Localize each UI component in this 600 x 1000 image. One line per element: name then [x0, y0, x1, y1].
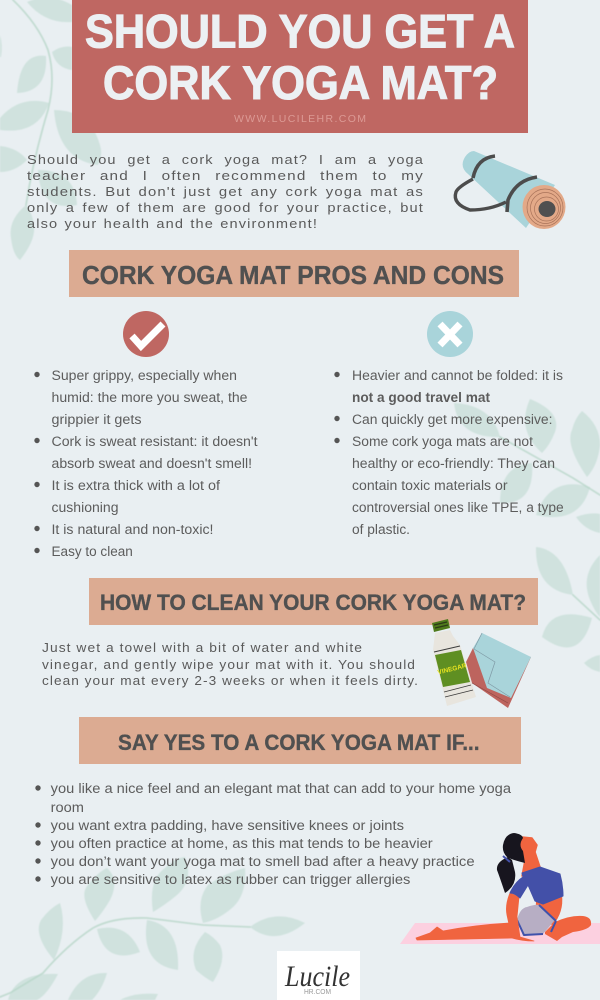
intro text: teacher and I often recommend them to my — [27, 168, 424, 183]
icon: rolled yoga mat — [455, 151, 566, 229]
list: say yes reasons: you like a nice feel and an elegant mat that can add to your home yoga — [51, 781, 512, 796]
decorative leaves: right lower branch — [536, 547, 600, 672]
icon: towel — [466, 633, 531, 708]
heading: say yes: SAY YES TO A CORK YOGA MAT IF... — [118, 730, 480, 755]
list: say yes reasons: you don’t want your yoga mat to smell bad after a heavy practice — [51, 854, 475, 869]
icon: cross mark — [427, 311, 473, 357]
list: pros: Super grippy, especially when — [52, 368, 237, 383]
heading: pros and cons: CORK YOGA MAT PROS AND CONS — [82, 262, 504, 290]
list: pros: absorb sweat and doesn't smell! — [52, 456, 252, 471]
illustration: woman in yoga pose — [400, 833, 600, 944]
icon: vinegar bottle: VINEGAR — [437, 662, 468, 676]
cleaning text: clean your mat every 2-3 weeks or when it feels dirty. — [42, 673, 419, 688]
list: pros: humid: the more you sweat, the — [52, 390, 248, 405]
intro text: Should you get a cork yoga mat? I am a yoga — [27, 152, 424, 167]
icon: check mark — [123, 311, 169, 357]
website: WWW.LUCILEHR.COM — [234, 113, 366, 125]
list: cons: Heavier and cannot be folded: it is — [352, 368, 563, 383]
list: cons: Some cork yoga mats are not — [352, 434, 533, 449]
list: cons: not a good travel mat — [352, 390, 490, 405]
intro text: students. But don't just get any cork yoga mat as — [27, 184, 424, 199]
title: SHOULD YOU GET A — [85, 4, 515, 58]
cleaning text — [42, 640, 419, 688]
logo: Lucile — [284, 960, 350, 993]
list: pros: grippier it gets — [52, 412, 142, 427]
cleaning text: Just wet a towel with a bit of water and white — [42, 640, 363, 655]
list: pros: Cork is sweat resistant: it doesn't — [52, 434, 258, 449]
list: cons: Can quickly get more expensive: — [352, 412, 552, 427]
logo — [277, 951, 360, 1000]
list: say yes reasons — [35, 781, 512, 887]
list: say yes reasons: you are sensitive to latex as rubber can trigger allergies — [51, 872, 411, 887]
logo: HR.COM — [304, 989, 331, 996]
list: pros: cushioning — [52, 500, 118, 515]
decorative leaves: right middle branch — [454, 399, 600, 533]
heading: how to clean — [89, 578, 538, 625]
list: pros: It is natural and non-toxic! — [52, 522, 214, 537]
cleaning text: vinegar, and gently wipe your mat with it. You should — [42, 657, 416, 672]
list: cons: of plastic. — [352, 522, 410, 537]
decorative leaves: bottom left branch — [0, 857, 305, 1000]
list: cons: controversial ones like TPE, a type — [352, 500, 564, 515]
list: pros: Easy to clean — [52, 544, 133, 559]
title: CORK YOGA MAT? — [103, 56, 498, 109]
list: pros — [34, 368, 258, 559]
list: pros: It is extra thick with a lot of — [52, 478, 220, 493]
intro text: only a few of them are good for your practice, but — [27, 200, 424, 215]
heading: how to clean: HOW TO CLEAN YOUR CORK YOGA MAT? — [100, 590, 526, 615]
decorative leaves: top left branch — [0, 0, 101, 260]
heading: say yes — [79, 717, 521, 764]
title — [85, 4, 515, 109]
list: cons: healthy or eco-friendly: They can — [352, 456, 555, 471]
heading: pros and cons — [69, 250, 519, 297]
list: cons — [334, 368, 564, 537]
title panel — [72, 0, 528, 133]
intro text — [27, 152, 424, 231]
list: say yes reasons: you often practice at home, as this mat tends to be heavier — [51, 836, 433, 851]
icon: vinegar bottle — [432, 619, 476, 706]
list: cons: contain toxic materials or — [352, 478, 508, 493]
intro text: also your health and the environment! — [27, 216, 318, 231]
list: say yes reasons: room — [51, 800, 84, 815]
list: say yes reasons: you want extra padding, have sensitive knees or joints — [51, 818, 404, 833]
